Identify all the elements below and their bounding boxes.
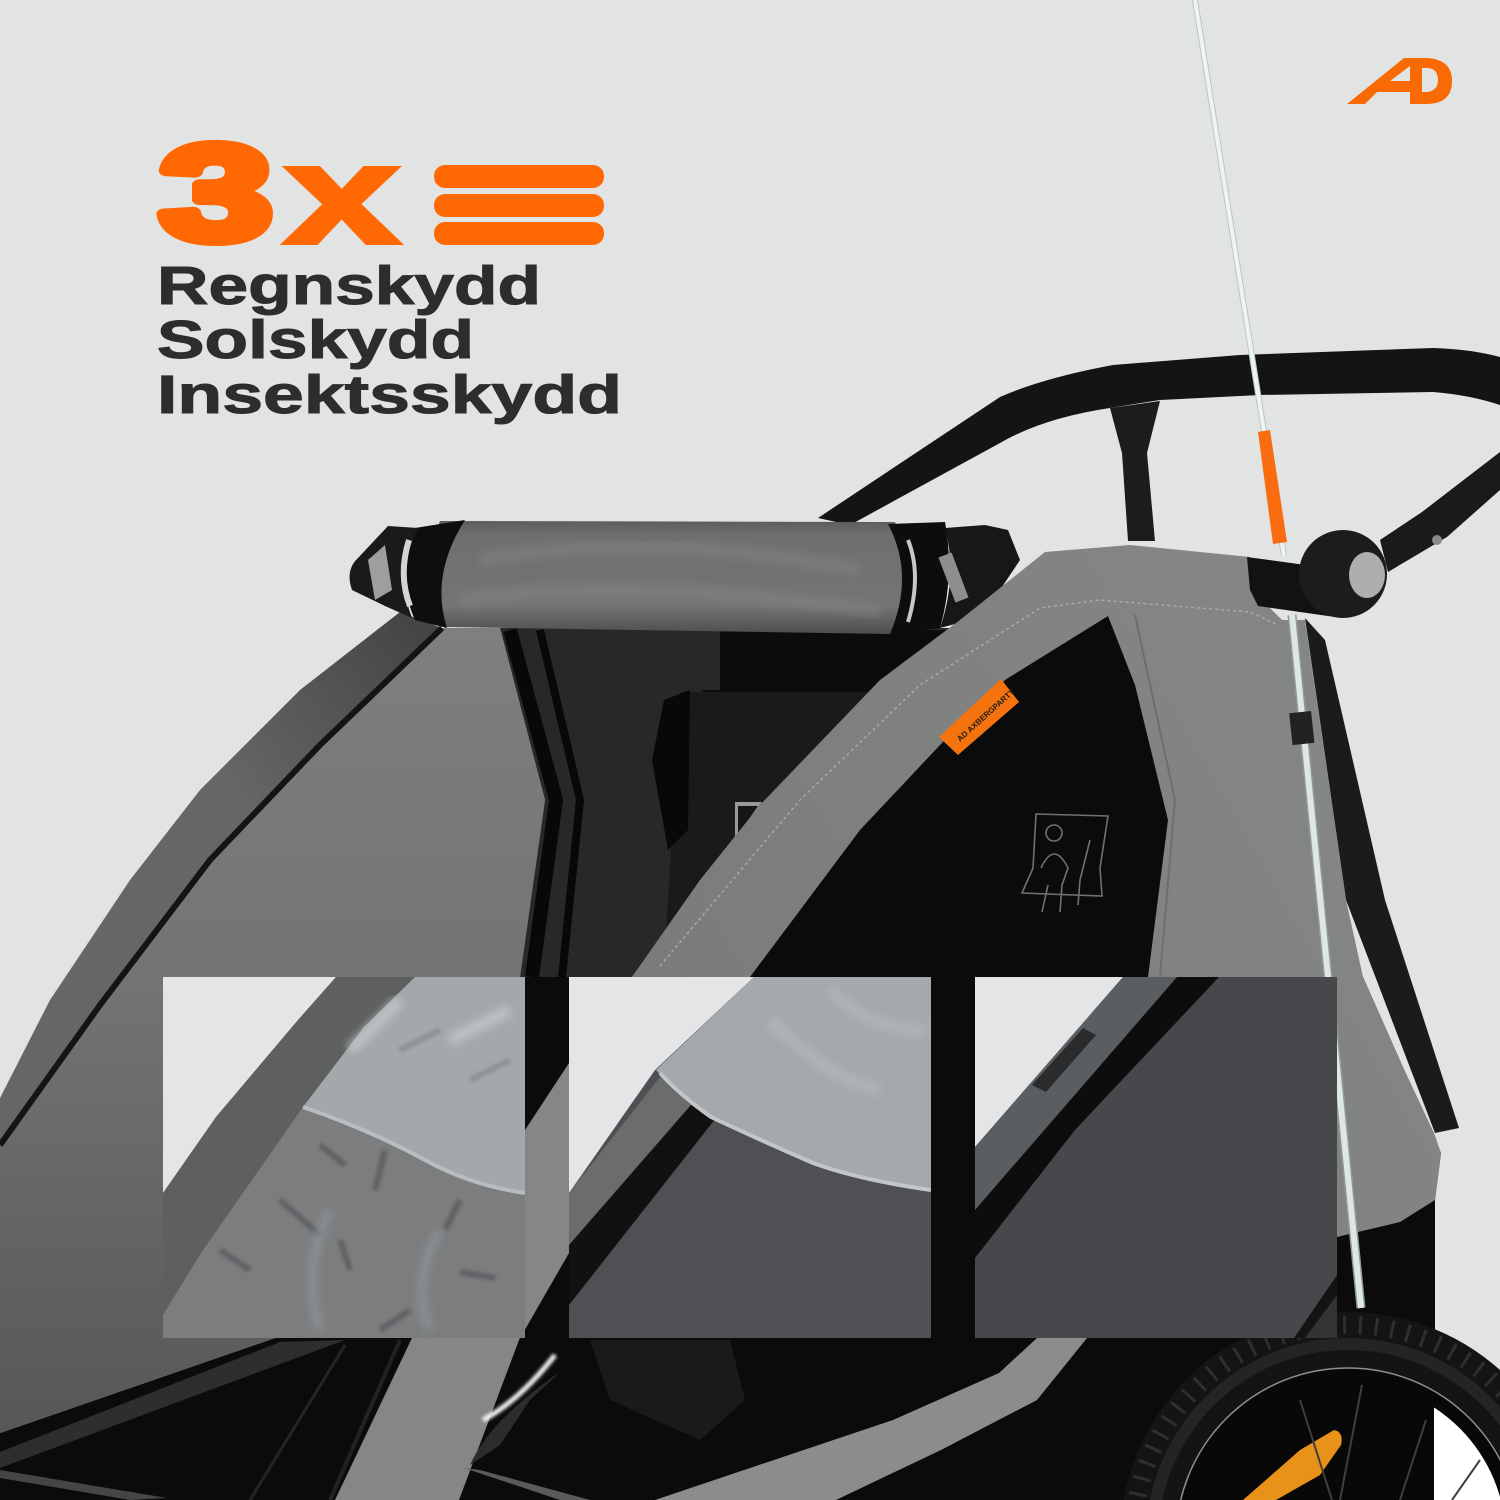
inset panel: rain cover (163, 977, 525, 1338)
orange canopy tag: AD AXBERGPARTY (955, 687, 1017, 743)
left canopy band (0, 612, 442, 1145)
title: 3x (160, 115, 400, 274)
right canopy panel (632, 545, 1441, 1237)
feature list: Regnskydd (157, 256, 541, 316)
inset panel: sun cover (569, 977, 931, 1338)
orange canopy tag (939, 679, 1019, 755)
feature list (157, 256, 622, 425)
lower gap strips (0, 1340, 400, 1500)
logo: AD (1347, 58, 1452, 104)
lower window trim (655, 1338, 1087, 1500)
feature list: Insektsskydd (157, 365, 622, 425)
centre dark interior (500, 628, 960, 977)
interior lower seat (464, 1340, 745, 1500)
title: 3x: 3 (160, 119, 272, 268)
right canopy window (660, 600, 1278, 977)
title: 3x: x (284, 115, 400, 274)
inset panel: insect net (975, 977, 1337, 1338)
rolled up canopy (350, 520, 1020, 634)
left canopy window (0, 628, 545, 1433)
wheel (1120, 1312, 1500, 1500)
canopy roof hinge (1247, 530, 1442, 618)
canopy pillar between panels (335, 1063, 569, 1500)
push handlebar (818, 348, 1500, 572)
icon: child seat diagram (1022, 814, 1108, 912)
flag pole (1195, 0, 1361, 1308)
icon: three layers (434, 165, 604, 245)
rear fabric strip (1305, 618, 1459, 1133)
feature list: Solskydd (157, 310, 474, 370)
dark body base (0, 977, 1441, 1500)
